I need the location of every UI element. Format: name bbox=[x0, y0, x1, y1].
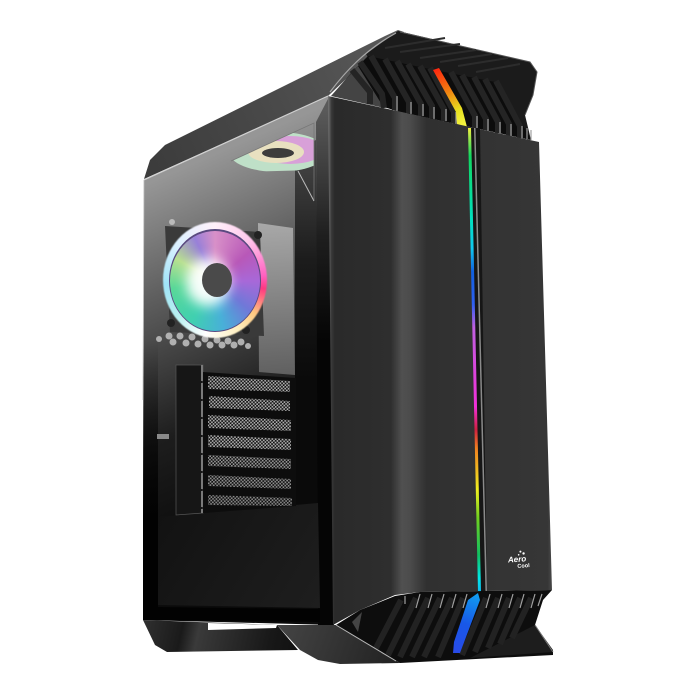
top rear flap bbox=[366, 31, 537, 140]
side top band bbox=[144, 30, 404, 179]
silver edge highlights bbox=[143, 33, 396, 661]
logo: Cool bbox=[517, 563, 530, 570]
logo: Aero bbox=[507, 554, 527, 565]
lower interior panel bbox=[176, 365, 203, 515]
infographic: PC tower case bbox=[142, 30, 554, 664]
cable tie bbox=[157, 434, 169, 439]
power supply shroud bbox=[158, 503, 320, 608]
bottom cooling fins bbox=[336, 590, 553, 663]
right interior column bbox=[295, 140, 319, 605]
case interior bbox=[143, 97, 334, 625]
window top fan bbox=[234, 133, 314, 172]
upper window frame line bbox=[231, 123, 314, 200]
rear mesh backing bbox=[203, 372, 296, 513]
front foot bbox=[277, 625, 400, 664]
slot bracket edge bbox=[201, 365, 203, 513]
tempered glass side panel bbox=[143, 96, 333, 625]
glass left frame bbox=[143, 340, 320, 622]
RGB rear fan bbox=[150, 210, 280, 350]
bottom LED segment bbox=[453, 593, 480, 653]
front panel bbox=[328, 96, 552, 625]
expansion slot rows bbox=[208, 376, 292, 506]
left foot bbox=[143, 620, 298, 652]
glass right frame bbox=[316, 97, 334, 625]
top LED segment bbox=[433, 68, 467, 127]
foot gap bbox=[208, 623, 277, 630]
ventilation honeycomb bbox=[156, 332, 251, 349]
logo bbox=[506, 550, 530, 571]
top cooling fins bbox=[331, 56, 531, 140]
rear fan frame bbox=[165, 219, 264, 336]
grey motherboard tray panel bbox=[258, 223, 295, 375]
vertical RGB light strip bbox=[468, 128, 487, 592]
fan support line bbox=[298, 171, 314, 201]
